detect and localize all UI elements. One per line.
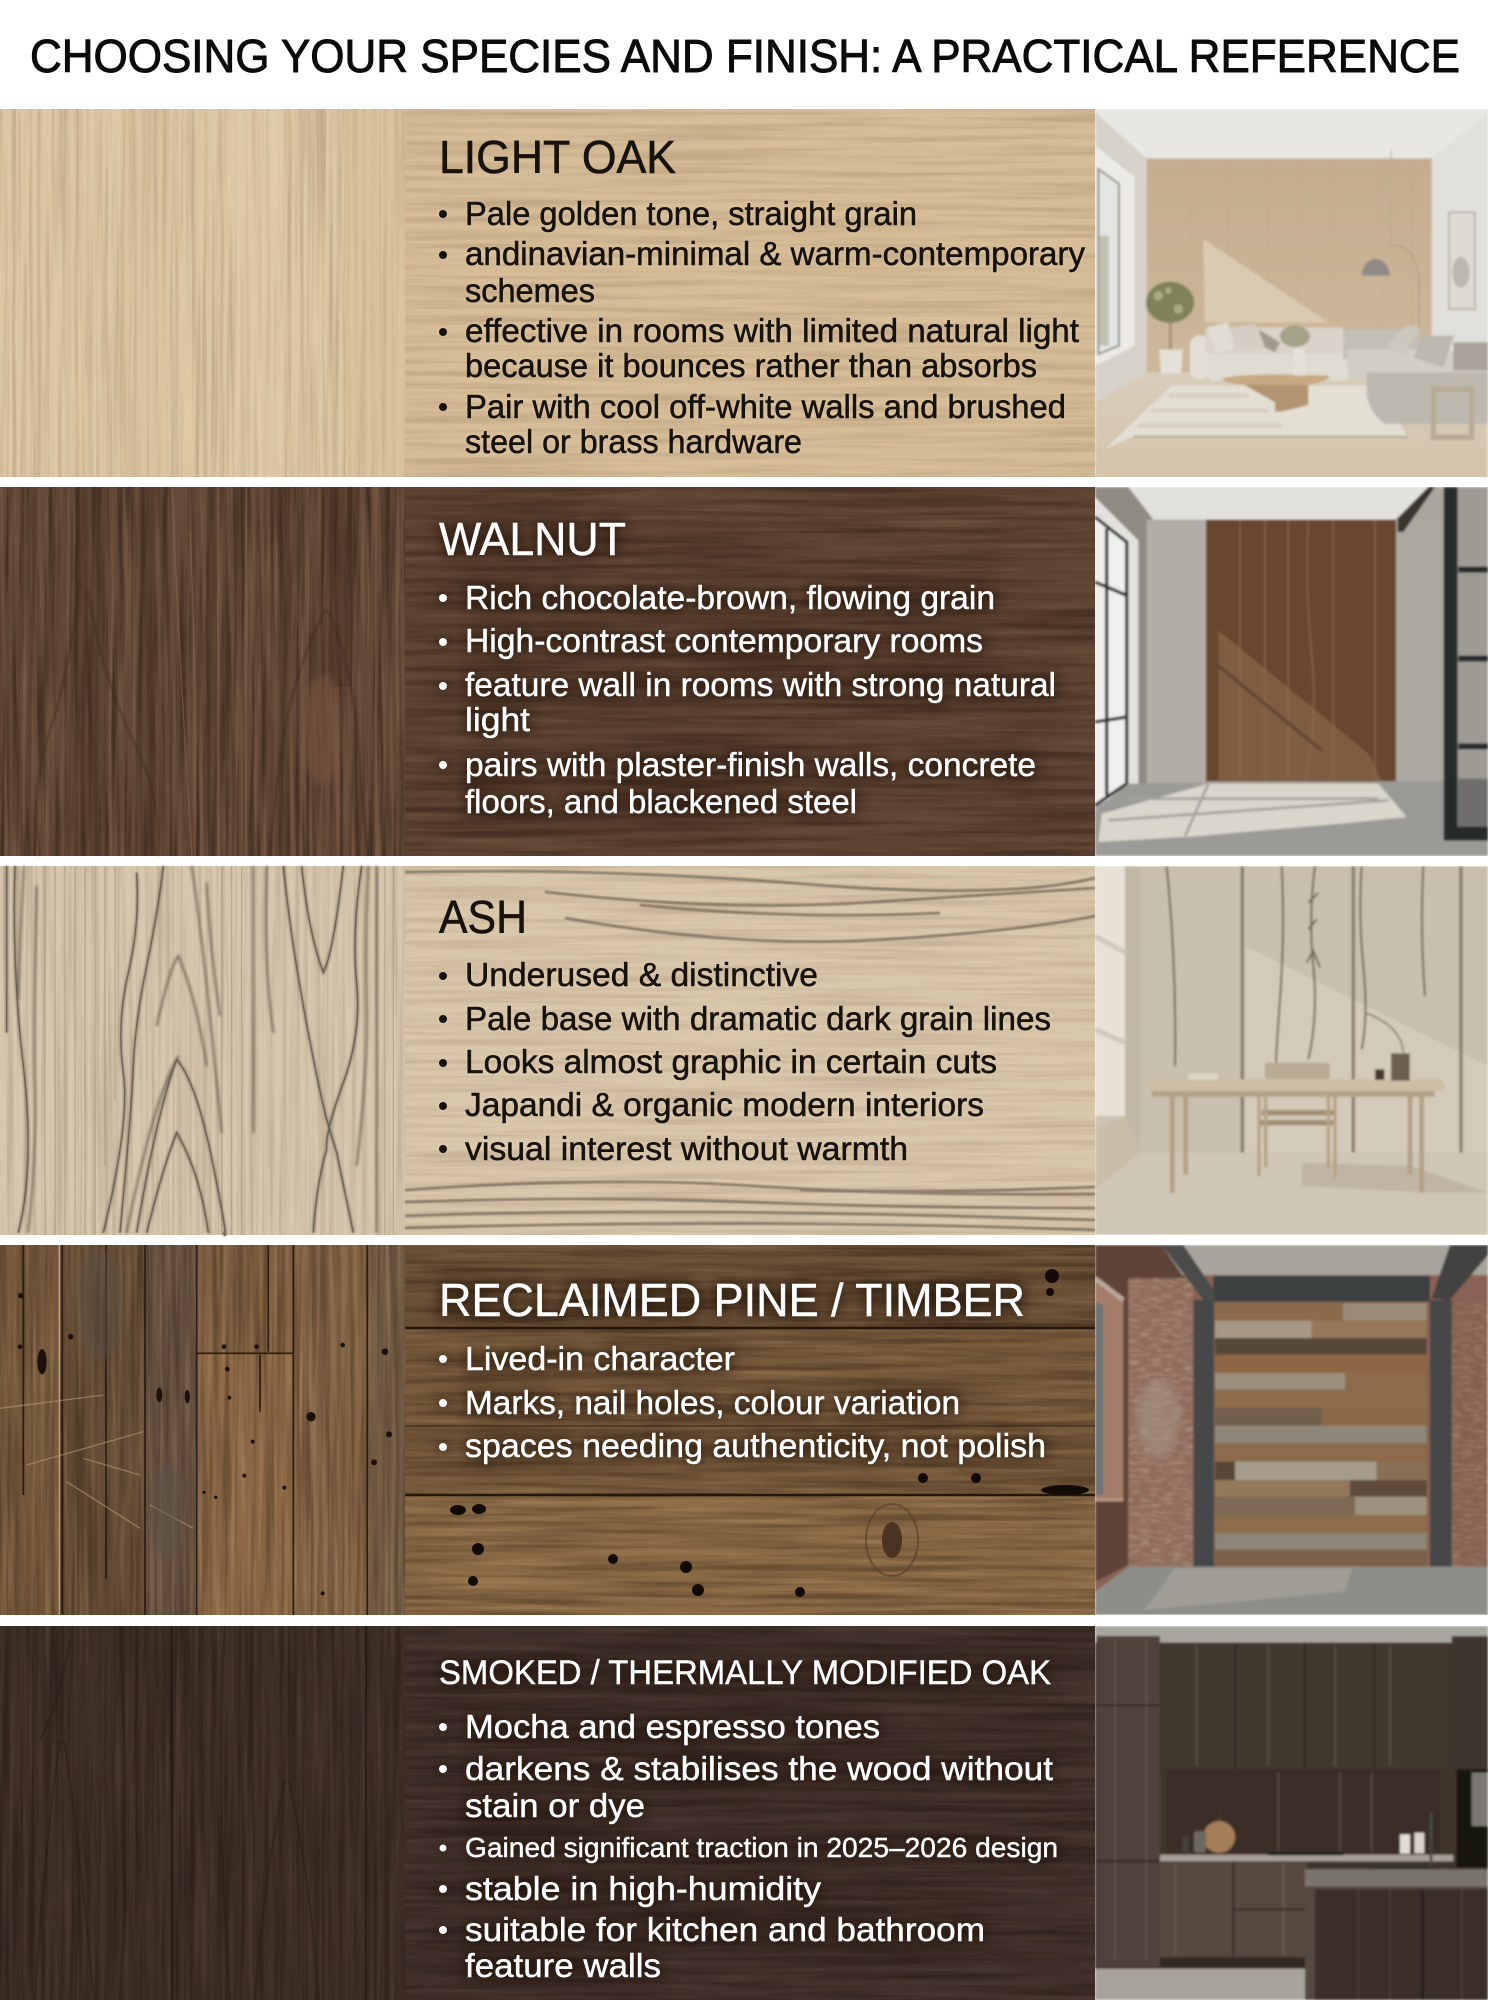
bullet list: reclaimed pine: Marks, nail holes, colour variation — [465, 1384, 960, 1421]
bullet list: light oak: Pale golden tone, straight grain — [465, 195, 917, 232]
panel: ash — [0, 866, 1488, 1235]
panel: light oak — [0, 109, 1488, 479]
heading: ash: ASH — [439, 891, 527, 943]
bullet list: walnut: High-contrast contemporary rooms — [465, 622, 983, 659]
wood background behind text — [405, 487, 1095, 856]
bullet list: smoked oak: feature walls — [465, 1947, 661, 1984]
bullet list: ash: visual interest without warmth — [465, 1130, 908, 1167]
bullet list: smoked oak: Mocha and espresso tones — [465, 1708, 880, 1745]
room photo: ash study — [1095, 866, 1488, 1235]
bullet list: ash: Pale base with dramatic dark grain lines — [465, 1000, 1051, 1037]
wood swatch: walnut — [0, 487, 405, 856]
bullet list: ash: Looks almost graphic in certain cuts — [465, 1043, 997, 1080]
bullet list: light oak: andinavian-minimal & warm-contemporary — [465, 235, 1085, 272]
bullet list: walnut: floors, and blackened steel — [465, 783, 857, 820]
room photo: reclaimed timber loft — [1095, 1245, 1488, 1615]
room photo: smoked oak kitchen — [1095, 1626, 1488, 2000]
bullet list: ash — [439, 956, 1051, 1167]
panel: smoked / thermally modified oak — [0, 1626, 1488, 2000]
bullet list: walnut: Rich chocolate-brown, flowing grain — [465, 579, 995, 616]
bullet list: smoked oak: suitable for kitchen and bathroom — [465, 1911, 985, 1948]
wood swatch: smoked oak — [0, 1626, 405, 2000]
bullet list: smoked oak: stain or dye — [465, 1787, 645, 1824]
room photo: light oak living room — [1095, 109, 1488, 479]
bullet list: ash: Underused & distinctive — [465, 956, 818, 993]
bullet list: light oak — [439, 195, 1085, 460]
panel: walnut — [0, 487, 1488, 856]
wood swatch: light oak — [0, 109, 405, 477]
bullet list: walnut: light — [465, 701, 530, 738]
panel: reclaimed pine / timber — [0, 1245, 1488, 1615]
wood background behind text — [405, 1245, 1095, 1615]
bullet list: smoked oak: darkens & stabilises the wood without — [465, 1750, 1053, 1787]
wood swatch: reclaimed pine — [0, 1245, 405, 1615]
wood background behind text — [405, 866, 1095, 1235]
bullet list: reclaimed pine: spaces needing authenticity, not polish — [465, 1427, 1046, 1464]
heading: walnut: WALNUT — [439, 513, 626, 565]
wood swatch: ash — [0, 866, 405, 1235]
bullet list: smoked oak: stable in high-humidity — [465, 1870, 822, 1907]
wood background behind text — [405, 1626, 1095, 2000]
bullet list: light oak: schemes — [465, 272, 595, 309]
wood background behind text — [405, 109, 1095, 477]
bullet list: walnut: feature wall in rooms with strong natural — [465, 666, 1056, 703]
bullet list: light oak: Pair with cool off-white walls and brushed — [465, 388, 1066, 425]
heading: light oak: LIGHT OAK — [439, 131, 676, 183]
bullet list: reclaimed pine — [439, 1340, 1046, 1464]
bullet list: ash: Japandi & organic modern interiors — [465, 1086, 984, 1123]
room photo: walnut feature wall — [1095, 487, 1488, 856]
bullet list: walnut: pairs with plaster-finish walls, concrete — [465, 746, 1036, 783]
bullet list: reclaimed pine: Lived-in character — [465, 1340, 735, 1377]
bullet list: smoked oak — [439, 1708, 1058, 1984]
bullet list: smoked oak: Gained significant traction in 2025–2026 design — [465, 1832, 1058, 1863]
bullet list: light oak: effective in rooms with limited natural light — [465, 312, 1079, 349]
heading: reclaimed pine / timber: RECLAIMED PINE / TIMBER — [439, 1274, 1025, 1326]
bullet list: walnut — [439, 579, 1056, 820]
title: CHOOSING YOUR SPECIES AND FINISH: A PRACTICAL REFERENCE — [30, 30, 1460, 82]
bullet list: light oak: because it bounces rather than absorbs — [465, 347, 1037, 384]
bullet list: light oak: steel or brass hardware — [465, 423, 802, 460]
heading: smoked / thermally modified oak: SMOKED / THERMALLY MODIFIED OAK — [439, 1654, 1051, 1692]
